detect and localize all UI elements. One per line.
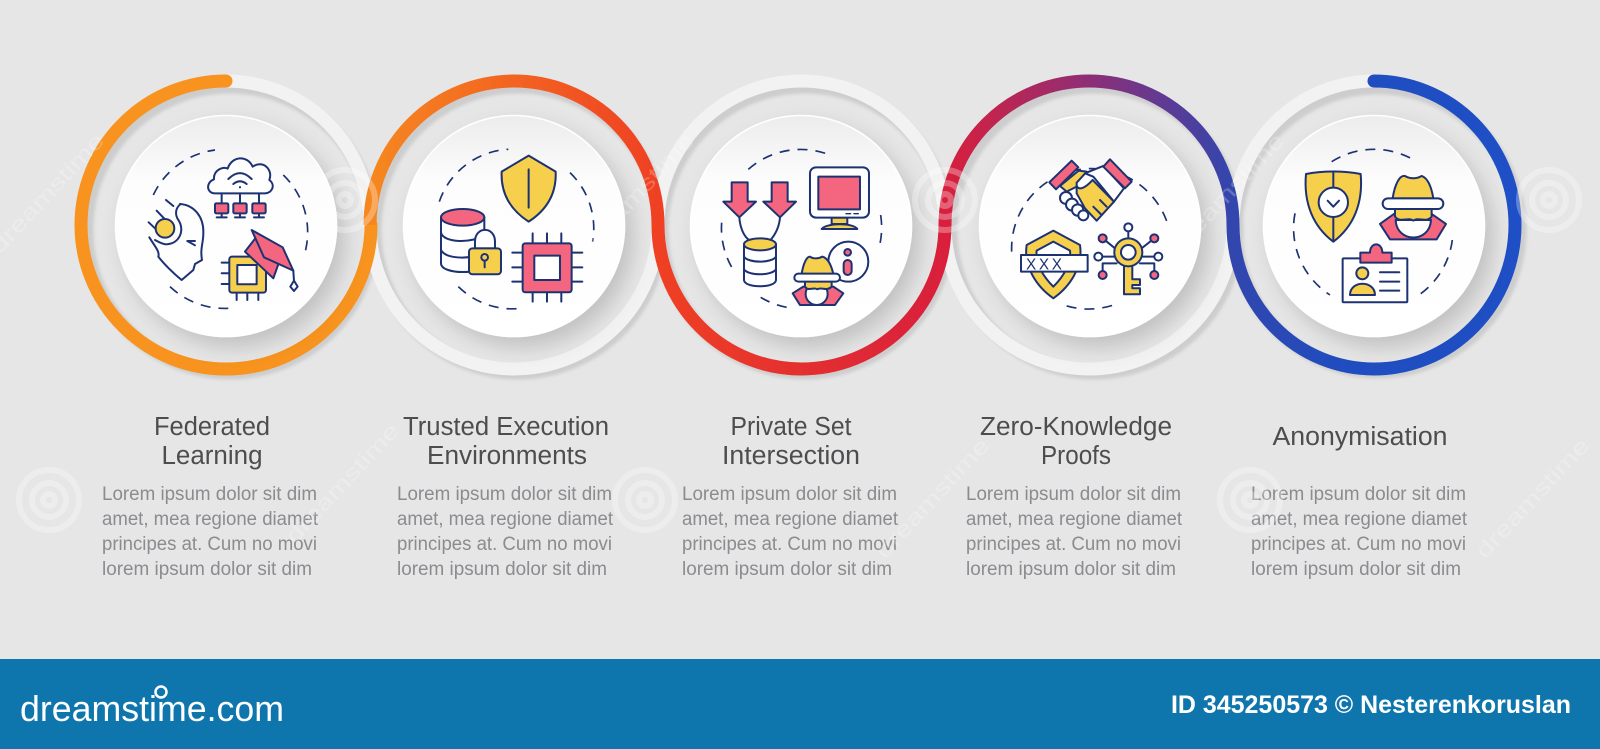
watermarks: dreamstime — [870, 433, 994, 563]
icon part: cloud network — [208, 158, 273, 217]
icon part: shield — [502, 156, 556, 222]
body text 3: Lorem ipsum dolor sit dim — [682, 484, 897, 505]
icon part: chip and graduation cap — [222, 230, 298, 300]
icon part: monitor — [810, 167, 869, 229]
footer logo: dreamstime.com — [20, 688, 284, 729]
segment 5 blue — [1233, 81, 1515, 369]
body text 1: amet, mea regione diamet — [102, 509, 319, 530]
ring shadows — [87, 87, 1520, 373]
body text 2: lorem ipsum dolor sit dim — [397, 559, 607, 580]
body text 2: principes at. Cum no movi — [397, 534, 612, 555]
heading: Private Set Intersection: Intersection — [722, 442, 860, 470]
column 2 text — [397, 413, 614, 580]
heading: Trusted Execution Environments: Trusted Execution — [403, 413, 609, 441]
segment 4 crimson to indigo — [945, 81, 1233, 225]
body text 4: lorem ipsum dolor sit dim — [966, 559, 1176, 580]
heading: Federated Learning — [154, 413, 270, 470]
icon: trusted execution — [439, 149, 594, 309]
body text 3: amet, mea regione diamet — [682, 509, 899, 530]
segment 1 orange — [81, 81, 371, 369]
watermarks: dreamstime — [280, 418, 404, 548]
heading: Trusted Execution Environments: Environments — [427, 442, 587, 470]
column 4 text — [966, 413, 1183, 580]
heading: Anonymisation: Anonymisation — [1272, 423, 1448, 451]
icon part: processor — [512, 233, 582, 302]
icon: private set intersection — [721, 149, 882, 307]
body text 5: lorem ipsum dolor sit dim — [1251, 559, 1461, 580]
body text 5: principes at. Cum no movi — [1251, 534, 1466, 555]
watermarks: dreamstime — [575, 128, 699, 258]
heading: Private Set Intersection: Private Set — [730, 413, 852, 441]
segment 5 rounded end — [1368, 74, 1381, 88]
body text 2: amet, mea regione diamet — [397, 509, 614, 530]
segment 3 red — [658, 225, 945, 369]
icon part: AI head — [149, 200, 203, 280]
body text 1: principes at. Cum no movi — [102, 534, 317, 555]
footer bar — [0, 659, 1600, 749]
body text 5: amet, mea regione diamet — [1251, 509, 1468, 530]
icon part: arrows into database — [723, 182, 796, 286]
icon part: password shield: XXX_ — [1026, 256, 1076, 273]
icon: federated learning — [149, 150, 308, 308]
body text 1: lorem ipsum dolor sit dim — [102, 559, 312, 580]
body text 3: principes at. Cum no movi — [682, 534, 897, 555]
heading: Zero-Knowledge Proofs: Zero-Knowledge — [980, 413, 1172, 441]
column 5 text — [1251, 423, 1468, 580]
body text 1 — [102, 484, 319, 580]
heading: Zero-Knowledge Proofs — [980, 413, 1172, 470]
icon part: handshake — [1049, 159, 1132, 221]
icon: zero-knowledge proofs — [1012, 159, 1169, 309]
heading: Private Set Intersection — [722, 413, 860, 470]
column 1 text — [102, 413, 319, 580]
icon part: database and lock — [441, 209, 501, 274]
body text 3 — [682, 484, 899, 580]
heading: Federated Learning: Federated — [154, 413, 270, 441]
icon part: shield with check — [1306, 171, 1361, 242]
heading: Trusted Execution Environments — [403, 413, 609, 470]
watermarks: dreamstime — [1470, 433, 1594, 563]
watermarks — [0, 128, 1594, 563]
watermarks: dreamstime — [1165, 128, 1289, 258]
body text 5 — [1251, 484, 1468, 580]
icon: anonymisation — [1294, 149, 1452, 302]
body text 4 — [966, 484, 1183, 580]
icon part: spy — [1380, 176, 1446, 239]
body text 2 — [397, 484, 614, 580]
white discs — [116, 116, 1484, 336]
icon part: ID card — [1343, 244, 1407, 302]
body text 4: amet, mea regione diamet — [966, 509, 1183, 530]
segment 2 orange to red — [370, 81, 658, 225]
icon part: password shield — [1021, 231, 1088, 298]
body text 4: Lorem ipsum dolor sit dim — [966, 484, 1181, 505]
icon part: spy and info bubble — [793, 242, 868, 305]
pale ring segments — [226, 81, 1374, 369]
heading: Zero-Knowledge Proofs: Proofs — [1041, 442, 1111, 470]
body text 5: Lorem ipsum dolor sit dim — [1251, 484, 1466, 505]
body text 3: lorem ipsum dolor sit dim — [682, 559, 892, 580]
body text 1: Lorem ipsum dolor sit dim — [102, 484, 317, 505]
footer credit: ID 345250573 © Nesterenkoruslan — [1171, 691, 1571, 719]
body text 2: Lorem ipsum dolor sit dim — [397, 484, 612, 505]
body text 4: principes at. Cum no movi — [966, 534, 1181, 555]
heading: Federated Learning: Learning — [162, 442, 262, 470]
coloured loop line — [81, 81, 1515, 369]
icon part: key with nodes — [1094, 223, 1162, 294]
column 3 text — [682, 413, 899, 580]
